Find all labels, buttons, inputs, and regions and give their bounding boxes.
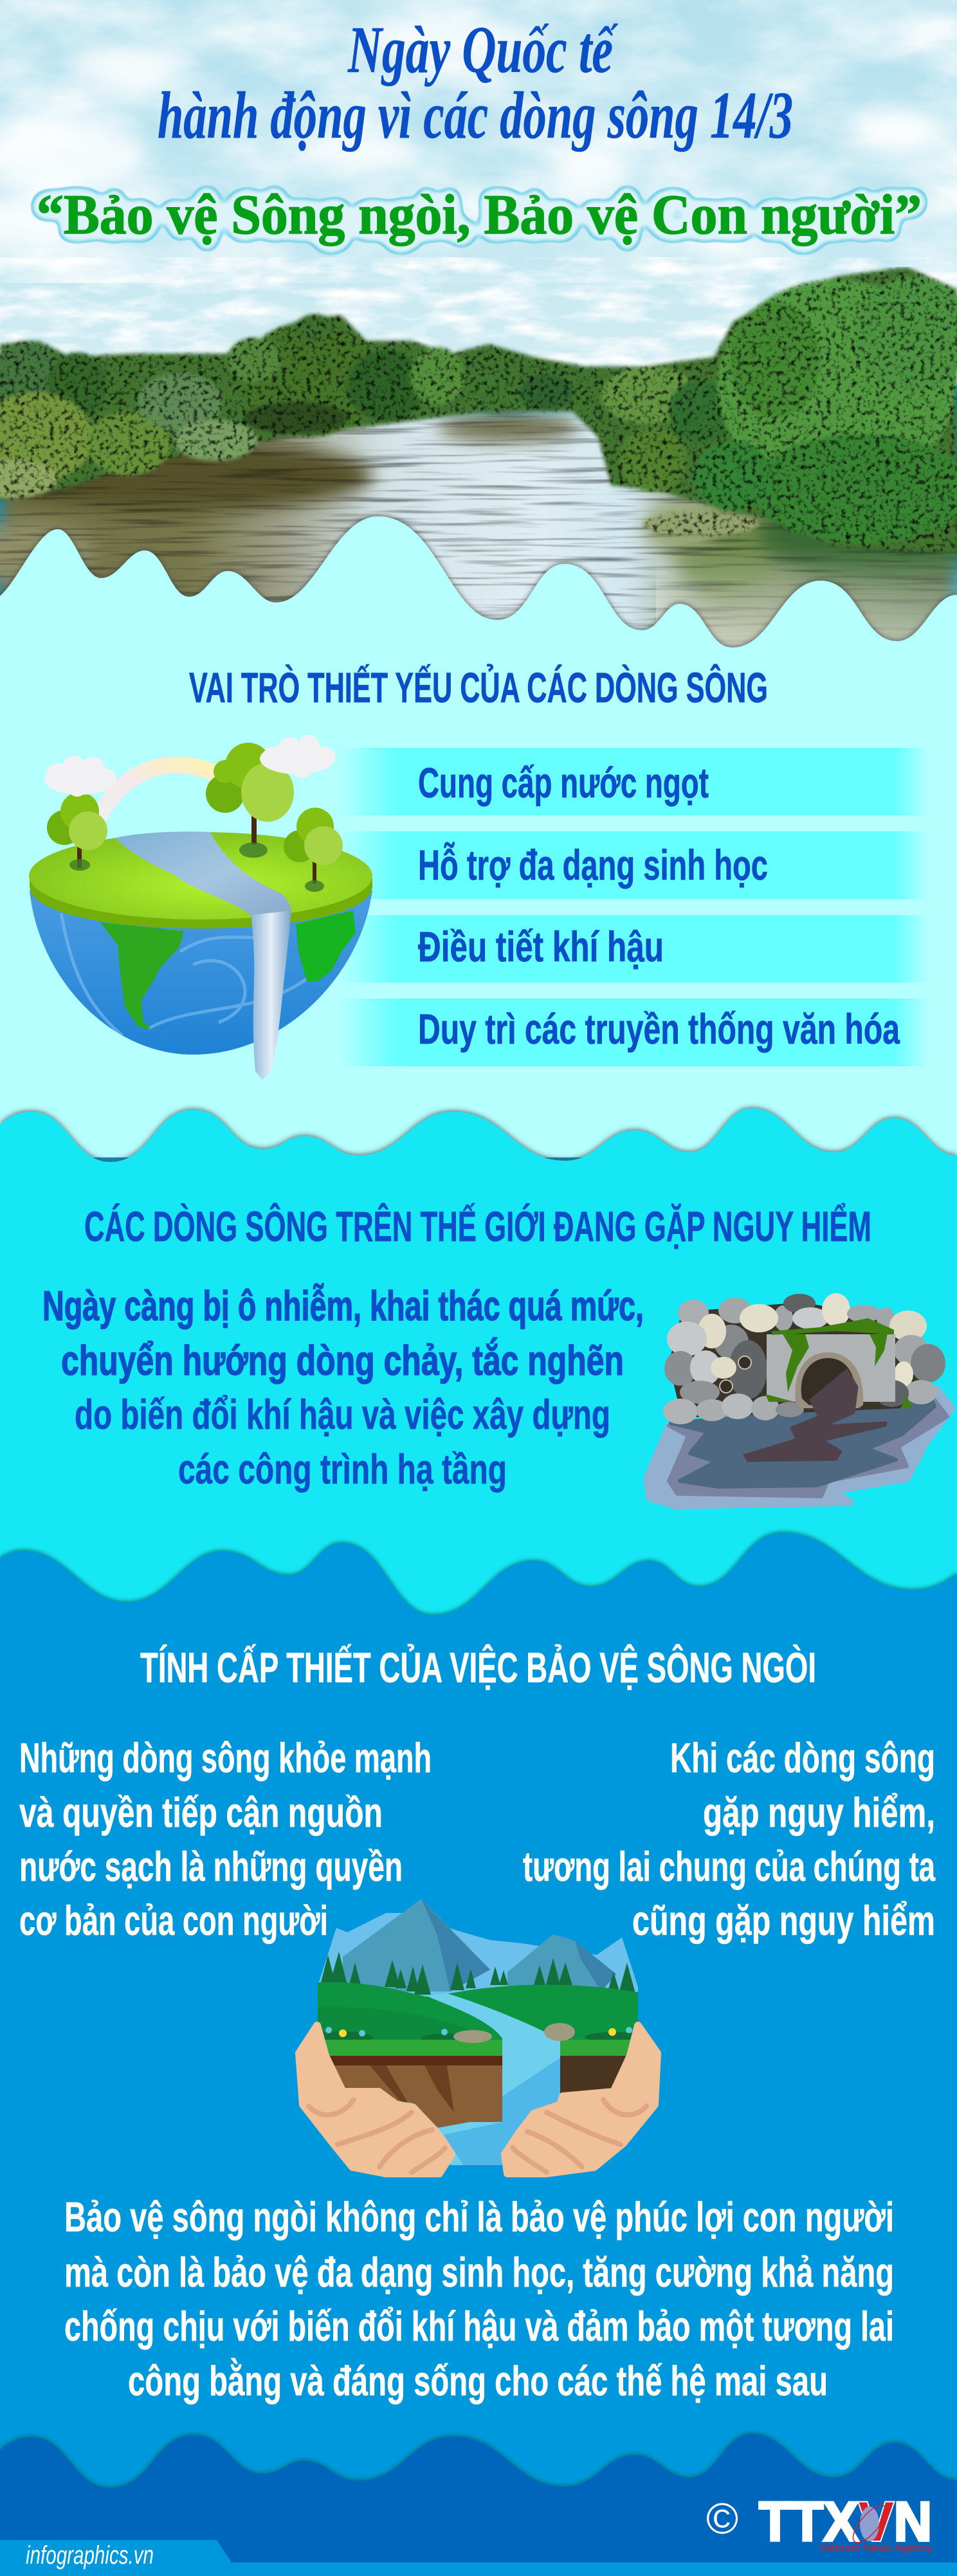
text block: threats: Ngày càng bị ô nhiễm, khai thác quá mức, [42, 1282, 644, 1329]
list bar 3: Điều tiết khí hậu [418, 923, 664, 970]
trees [0, 267, 957, 553]
website label: infographics.vn [26, 2541, 154, 2570]
river water [0, 405, 957, 656]
text block: threats [42, 1282, 644, 1492]
panel: vital role of rivers [0, 516, 957, 1157]
text block: conclusion [64, 2193, 894, 2404]
text block: healthy rivers are a human right: cơ bản của con người [19, 1897, 328, 1944]
list bar 1: Cung cấp nước ngọt [418, 759, 709, 806]
icon: hands holding a landscape with waterfall [299, 1899, 657, 2173]
text block: healthy rivers are a human right [19, 1734, 432, 1944]
logo: TTXVN: TTXVN [759, 2491, 932, 2553]
slogan with cloud-shaped halo: “Bảo vệ Sông ngòi, Bảo vệ Con người” [37, 184, 922, 246]
logo: TTXVN: Vietnam News Agency [819, 2542, 933, 2554]
text block: rivers at risk means shared future at risk [523, 1734, 936, 1944]
list bar 1 [338, 748, 929, 815]
panel: footer [0, 2434, 957, 2576]
right-bank fade [656, 553, 957, 648]
title line 1: Ngày Quốc tế [347, 13, 618, 87]
text block: healthy rivers are a human right: Những dòng sông khỏe mạnh [19, 1734, 432, 1781]
text block: healthy rivers are a human right: nước sạch là những quyền [19, 1843, 403, 1890]
text block: healthy rivers are a human right: và quyền tiếp cận nguồn [19, 1789, 383, 1836]
list bar 3 [338, 915, 929, 983]
list bar 4 [338, 999, 929, 1066]
text block: threats: do biến đổi khí hậu và việc xây dựng [75, 1391, 610, 1438]
panel: rivers in danger [0, 1109, 957, 1627]
copyright symbol: © [706, 2494, 738, 2543]
list bar 2 [338, 831, 929, 899]
photo: sky and river landscape [0, 0, 957, 656]
text block: threats: chuyển hướng dòng chảy, tắc nghẽn [61, 1337, 624, 1384]
list bar 2: Hỗ trợ đa dạng sinh học [418, 841, 768, 889]
sky [0, 0, 957, 386]
icon: half globe with island, trees and waterfall [29, 735, 372, 1080]
bottom strip and tab [0, 2540, 957, 2576]
text block: threats: các công trình hạ tầng [178, 1446, 507, 1492]
panel: urgency of protecting rivers [0, 1533, 957, 2508]
icon: polluted outflow pipe in stone wall [646, 1293, 952, 1506]
